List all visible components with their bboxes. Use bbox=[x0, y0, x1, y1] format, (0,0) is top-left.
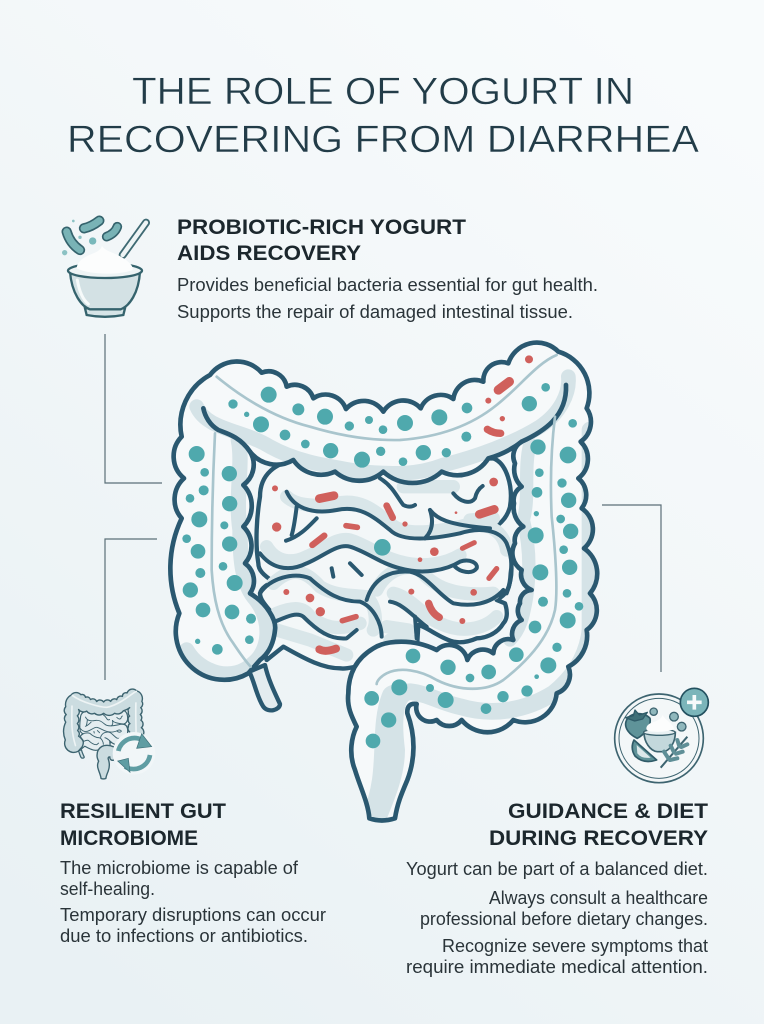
connector: yogurt to colon bbox=[105, 334, 162, 483]
text block: probiotic-rich yogurt: PROBIOTIC-RICH YOGURT bbox=[177, 216, 466, 239]
connector: diet to colon bbox=[602, 505, 661, 672]
illustration: intestines bbox=[170, 343, 597, 820]
title: THE ROLE OF YOGURT IN bbox=[132, 71, 634, 113]
text block: resilient gut microbiome: The microbiome is capable of bbox=[60, 858, 299, 878]
red damage patches bbox=[312, 382, 509, 651]
large intestine shading bbox=[187, 377, 590, 817]
connector: microbiome to colon bbox=[105, 539, 157, 680]
text block: resilient gut microbiome: due to infections or antibiotics. bbox=[60, 926, 308, 946]
red damage dots bbox=[272, 355, 533, 624]
text block: probiotic-rich yogurt bbox=[177, 216, 598, 322]
small intestine bbox=[257, 458, 512, 669]
small intestine inner walls bbox=[260, 478, 512, 639]
title bbox=[67, 71, 700, 161]
text block: guidance and diet: require immediate medical attention. bbox=[406, 957, 708, 977]
icon: yogurt bowl with probiotic bacteria bbox=[62, 220, 146, 317]
text block: guidance and diet: DURING RECOVERY bbox=[489, 827, 708, 850]
text block: probiotic-rich yogurt: Provides beneficial bacteria essential for gut health. bbox=[177, 275, 598, 295]
colon centre lines bbox=[212, 355, 557, 689]
teal probiotic dots bbox=[182, 383, 583, 748]
text block: resilient gut microbiome bbox=[60, 800, 326, 946]
text block: resilient gut microbiome: RESILIENT GUT bbox=[60, 800, 226, 823]
text block: guidance and diet: GUIDANCE & DIET bbox=[508, 800, 708, 823]
large intestine bbox=[170, 343, 597, 820]
small intestine shading bbox=[267, 487, 507, 655]
icon: healthy plate with plus badge bbox=[615, 688, 708, 783]
text block: guidance and diet bbox=[406, 800, 708, 977]
appendix bbox=[249, 665, 280, 710]
text block: guidance and diet: Recognize severe symptoms that bbox=[442, 936, 708, 956]
text block: probiotic-rich yogurt: Supports the repair of damaged intestinal tissue. bbox=[177, 302, 573, 322]
icon: gut with recycle arrows bbox=[64, 689, 155, 779]
text block: guidance and diet: professional before dietary changes. bbox=[420, 909, 708, 929]
text block: guidance and diet: Yogurt can be part of a balanced diet. bbox=[406, 859, 708, 879]
text block: guidance and diet: Always consult a healthcare bbox=[489, 888, 708, 908]
text block: probiotic-rich yogurt: AIDS RECOVERY bbox=[177, 242, 361, 265]
text block: resilient gut microbiome: Temporary disruptions can occur bbox=[60, 905, 326, 925]
text block: resilient gut microbiome: MICROBIOME bbox=[60, 827, 198, 850]
text block: resilient gut microbiome: self-healing. bbox=[60, 879, 155, 899]
title: RECOVERING FROM DIARRHEA bbox=[67, 119, 700, 161]
colon outline bbox=[170, 343, 597, 820]
